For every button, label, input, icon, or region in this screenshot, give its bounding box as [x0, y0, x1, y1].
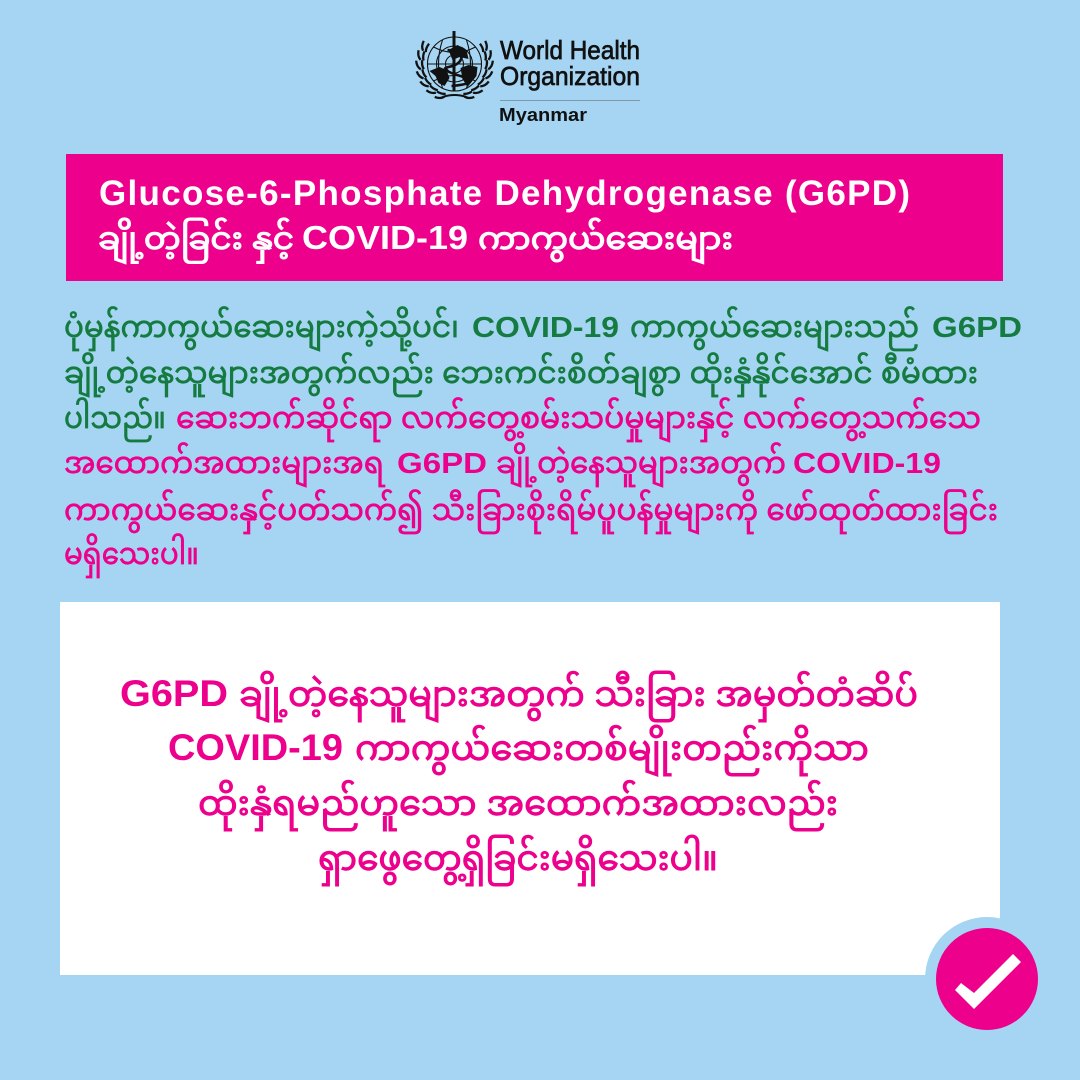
body line 2: ချို့တဲ့နေသူများအတွက်လည်း ဘေးကင်းစိတ်ချစွာ ထိုးနှံနိုင်အောင် စီမံထား — [64, 351, 978, 398]
callout line 4: ရှာဖွေတွေ့ရှိခြင်းမရှိသေးပါ။ — [318, 834, 718, 886]
callout line 1 — [120, 670, 918, 723]
callout line 2: COVID-19 — [168, 727, 343, 768]
body line 4: COVID-19 — [793, 448, 941, 480]
body line 1: ကာကွယ်ဆေးများသည် — [630, 305, 919, 352]
body line 1: G6PD — [932, 312, 1022, 344]
body line 4 — [64, 441, 941, 488]
country name: Myanmar — [499, 105, 587, 125]
title line 2: COVID-19 — [302, 219, 468, 256]
body text — [64, 305, 1022, 579]
body line 3 — [64, 396, 981, 443]
body line 1 — [64, 305, 1022, 352]
logo: World Health Organization Myanmar — [416, 31, 640, 125]
title line 2: ချို့တဲ့ခြင်း နှင့် — [98, 217, 294, 264]
wordmark — [500, 35, 640, 91]
icon: WHO emblem — [416, 31, 493, 100]
title panel — [66, 154, 1003, 281]
body line 1: COVID-19 — [472, 312, 619, 344]
callout line 2: ကာကွယ်ဆေးတစ်မျိုးတည်းကိုသာ — [355, 724, 869, 777]
body line 3: ပါသည်။ — [64, 396, 166, 443]
body line 4: အထောက်အထားများအရ — [64, 441, 385, 488]
wordmark: World Health — [500, 35, 640, 65]
callout line 2 — [168, 724, 869, 777]
title line 2: ကာကွယ်ဆေးများ — [478, 217, 733, 264]
callout line 1: ချို့တဲ့နေသူများအတွက် သီးခြား အမှတ်တံဆိပ် — [239, 670, 918, 723]
body line 5: ကာကွယ်ဆေးနှင့်ပတ်သက်၍ သီးခြားစိုးရိမ်ပူပန်မှုများကို ဖော်ထုတ်ထားခြင်း — [64, 488, 998, 535]
body line 4: ချို့တဲ့နေသူများအတွက် — [496, 441, 786, 488]
title line 2 — [98, 217, 733, 264]
callout line 1: G6PD — [120, 673, 228, 714]
callout panel — [60, 602, 1000, 975]
body line 6: မရှိသေးပါ။ — [64, 532, 199, 579]
body line 4: G6PD — [397, 448, 487, 480]
icon: check mark badge — [925, 917, 1049, 1041]
wordmark: Organization — [500, 61, 640, 91]
callout line 3: ထိုးနှံရမည်ဟူသော အထောက်အထားလည်း — [198, 779, 838, 831]
title line 1: Glucose-6-Phosphate Dehydrogenase (G6PD) — [99, 174, 910, 213]
body line 1: ပုံမှန်ကာကွယ်ဆေးများကဲ့သို့ပင်၊ — [64, 305, 459, 352]
body line 3: ဆေးဘက်ဆိုင်ရာ လက်တွေ့စမ်းသပ်မှုများနှင့် လက်တွေ့သက်သေ — [176, 396, 981, 443]
